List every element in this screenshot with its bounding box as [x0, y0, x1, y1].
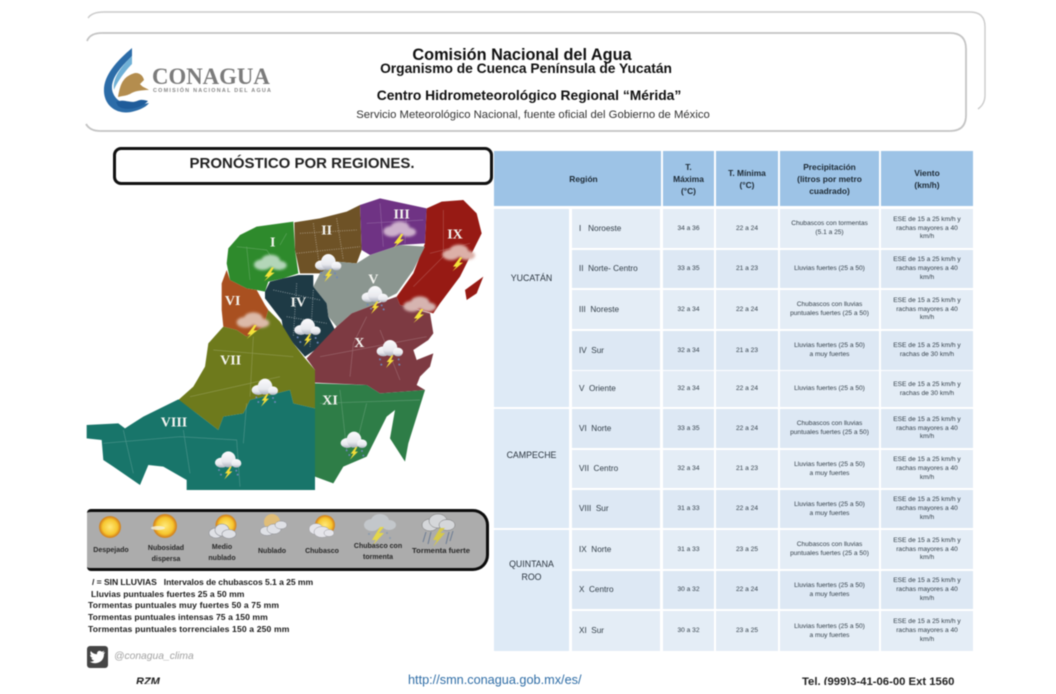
icon: pink cloud region X north: [403, 296, 436, 323]
row: VI Norte: 33 a 35: [678, 425, 700, 432]
heading: organization: [356, 46, 710, 122]
state: Yucatán: YUCATÁN: [511, 273, 552, 283]
row: X Centro: Lluvias fuertes (25 a 50): [794, 582, 865, 589]
icon: pink cloud region IX: [442, 245, 475, 271]
state: Quintana Roo: [494, 530, 569, 651]
row: VII Centro: a muy fuertes: [810, 470, 849, 476]
table header: cuadrado): [809, 186, 850, 196]
website link: http://smn.conagua.gob.mx/es/: [408, 673, 582, 687]
row: III Noreste: 32 a 34: [678, 306, 700, 313]
legend panel: Despejado: [93, 547, 129, 554]
row: I Noroeste: 22 a 24: [736, 225, 758, 232]
region polygons: [87, 198, 483, 490]
rainfall intensity notes: Tormentas puntuales intensas 75 a 150 mm: [88, 612, 268, 622]
row: III Noreste: ESE de 15 a 25 km/h y: [893, 297, 961, 304]
row: XI Sur: ESE de 15 a 25 km/h y: [893, 618, 961, 625]
row: XI Sur: km/h: [920, 636, 934, 643]
row: X Centro: rachas mayores a 40: [896, 586, 958, 593]
row: III Noreste: km/h: [920, 314, 934, 321]
row: X Centro: ESE de 15 a 25 km/h y: [893, 577, 961, 584]
row: IX Norte: [572, 530, 974, 570]
icon: pink cloud region VI: [237, 312, 269, 339]
state: Yucatán: [494, 209, 569, 407]
legend panel: Nubosidad: [148, 545, 184, 552]
twitter handle: @conagua_clima: [114, 651, 194, 662]
row: V Oriente: 32 a 34: [678, 385, 700, 392]
region labels: X: [354, 336, 364, 351]
heading: organization: Organismo de Cuenca Península de Yucatán: [380, 61, 672, 76]
legend panel: Tormenta fuerte: [412, 546, 470, 555]
row: VI Norte: Chubascos con lluvias: [797, 420, 862, 427]
legend panel: Nublado: [258, 548, 286, 555]
icon: chubasco: [309, 515, 335, 538]
row: VI Norte: VI Norte: [579, 424, 611, 433]
row: X Centro: [572, 570, 974, 610]
row: II Norte-Centro: Lluvias fuertes (25 a 50): [794, 265, 865, 272]
map texture lines: [103, 203, 470, 487]
row: II Norte-Centro: km/h: [920, 274, 934, 281]
region labels: VIII: [161, 416, 187, 431]
row: VI Norte: [572, 408, 974, 448]
row: XI Sur: 30 a 32: [678, 627, 700, 634]
icon: despejado: [99, 516, 121, 538]
row: X Centro: km/h: [920, 595, 934, 602]
row: VIII Sur: VIII Sur: [579, 504, 609, 513]
heading: organization: Centro Hidrometeorológico Regional “Mérida”: [377, 87, 681, 103]
row: I Noroeste: I Noroeste: [579, 224, 621, 233]
legend panel: tormenta: [363, 554, 393, 560]
row: VIII Sur: Lluvias fuertes (25 a 50): [794, 501, 865, 508]
row: VI Norte: km/h: [920, 433, 934, 440]
row: III Noreste: III Noreste: [579, 305, 619, 314]
table header: (litros por metro: [797, 174, 862, 184]
row: XI Sur: a muy fuertes: [810, 632, 849, 638]
legend panel: Chubasco con: [354, 543, 402, 550]
row: XI Sur: [572, 610, 974, 652]
region labels: VII: [220, 353, 241, 368]
icon: nubosidad dispersa: [151, 514, 177, 538]
rainfall intensity notes: Lluvias puntuales fuertes 25 a 50 mm: [91, 589, 244, 599]
row: XI Sur: XI Sur: [579, 626, 604, 635]
table header: (°C): [740, 180, 754, 190]
logo: CONAGUA: COMISIÓN NACIONAL DEL AGUA: [153, 88, 272, 94]
row: III Noreste: puntuales fuertes (25 a 50): [790, 310, 869, 317]
row: X Centro: X Centro: [579, 585, 614, 594]
panel title: pronóstico por regiones: PRONÓSTICO POR REGIONES.: [189, 155, 415, 172]
legend panel: [87, 509, 489, 571]
rainfall intensity notes: [88, 577, 314, 634]
row: IX Norte: puntuales fuertes (25 a 50): [790, 550, 869, 557]
legend panel: Medio: [212, 544, 232, 551]
table header: Viento: [914, 168, 940, 178]
legend panel: nublado: [208, 554, 236, 562]
row: IV Sur: a muy fuertes: [810, 351, 849, 358]
row: V Oriente: V Oriente: [579, 384, 616, 393]
row: VI Norte: 22 a 24: [736, 425, 758, 432]
row: II Norte-Centro: 21 a 23: [736, 265, 758, 272]
row: VII Centro: rachas mayores a 40: [896, 465, 958, 472]
row: V Oriente: Lluvias fuertes (25 a 50): [794, 385, 865, 392]
row: VII Centro: 32 a 34: [678, 465, 700, 472]
row: I Noroeste: rachas mayores a 40: [896, 225, 958, 232]
row: VIII Sur: km/h: [920, 514, 934, 521]
icon: storm cloud region X: [377, 340, 403, 368]
icon: nublado: [260, 514, 287, 536]
header frames: [85, 10, 986, 132]
row: XI Sur: rachas mayores a 40: [896, 627, 958, 634]
row: VIII Sur: a muy fuertes: [810, 510, 849, 516]
logo: CONAGUA: CONAGUA: [152, 64, 270, 89]
region labels: [161, 208, 463, 431]
table header: Máxima: [673, 174, 704, 184]
row: IV Sur: 32 a 34: [678, 347, 700, 354]
row: IX Norte: 23 a 25: [736, 546, 758, 553]
row: VIII Sur: 22 a 24: [736, 505, 758, 512]
region labels: V: [368, 272, 378, 287]
row: I Noroeste: (5.1 a 25): [815, 229, 844, 236]
region labels: XI: [322, 393, 338, 408]
icon: translucent green cloud region I: [254, 255, 287, 281]
row: III Noreste: [572, 290, 974, 330]
icon: medio nublado: [209, 514, 236, 538]
rainfall intensity notes: / = SIN LLUVIAS Intervalos de chubascos 5.1 a 25 mm: [92, 577, 313, 587]
state: Quintana Roo: ROO: [521, 572, 542, 582]
table header: T. Mínima: [728, 168, 766, 178]
row: VII Centro: km/h: [920, 474, 934, 481]
table header: [493, 150, 974, 206]
region labels: IX: [447, 227, 463, 242]
heading: organization: Servicio Meteorológico Nacional, fuente oficial del Gobierno de México: [356, 109, 710, 121]
row: IX Norte: ESE de 15 a 25 km/h y: [893, 537, 961, 544]
row: I Noroeste: km/h: [920, 233, 934, 240]
row: IV Sur: Lluvias fuertes (25 a 50): [794, 342, 865, 349]
row: VIII Sur: [572, 490, 974, 528]
row: I Noroeste: Chubascos con tormentas: [791, 220, 868, 227]
table header: T.: [685, 162, 692, 172]
region labels: VI: [225, 294, 240, 309]
row: XI Sur: Lluvias fuertes (25 a 50): [794, 623, 865, 630]
row: IX Norte: 31 a 33: [678, 546, 700, 553]
icon: storm cloud region V: [362, 286, 388, 314]
row: VI Norte: puntuales fuertes (25 a 50): [790, 429, 869, 436]
state: Quintana Roo: QUINTANA: [509, 559, 554, 569]
row: IX Norte: IX Norte: [579, 545, 611, 554]
row: II Norte-Centro: rachas mayores a 40: [896, 265, 958, 272]
row: III Noreste: rachas mayores a 40: [896, 306, 958, 313]
legend labels: [93, 542, 470, 563]
heading: organization: Comisión Nacional del Agua: [412, 46, 632, 64]
row: IV Sur: ESE de 15 a 25 km/h y: [893, 342, 961, 349]
row: IX Norte: Chubascos con lluvias: [797, 541, 862, 548]
row: X Centro: 30 a 32: [678, 586, 700, 593]
row: III Noreste: 22 a 24: [736, 306, 758, 313]
row: VIII Sur: ESE de 15 a 25 km/h y: [893, 496, 961, 503]
row: VI Norte: rachas mayores a 40: [896, 425, 958, 432]
icon: pink cloud region III: [383, 221, 416, 248]
rainfall intensity notes: Tormentas puntuales muy fuertes 50 a 75 mm: [88, 600, 279, 610]
region labels: II: [321, 223, 332, 238]
rainfall intensity notes: Tormentas puntuales torrenciales 150 a 250 mm: [88, 624, 290, 634]
row: II Norte-Centro: ESE de 15 a 25 km/h y: [893, 256, 961, 263]
row: II Norte-Centro: II Norte- Centro: [579, 264, 638, 273]
row: IX Norte: rachas mayores a 40: [896, 546, 958, 553]
row: VIII Sur: 31 a 33: [678, 505, 700, 512]
row: II Norte-Centro: 33 a 35: [678, 265, 700, 272]
row: V Oriente: [572, 370, 974, 408]
icon: storm cloud region VIII: [215, 451, 241, 479]
table header: (km/h): [914, 180, 940, 190]
region labels: I: [270, 236, 275, 251]
icon: chubasco con tormenta: [364, 514, 396, 546]
row: XI Sur: 23 a 25: [736, 627, 758, 634]
row: I Noroeste: [572, 208, 974, 248]
row: III Noreste: Chubascos con lluvias: [797, 301, 862, 308]
table header: Región: [569, 174, 598, 184]
legend panel: dispersa: [152, 556, 180, 562]
row: VII Centro: ESE de 15 a 25 km/h y: [893, 456, 961, 463]
icon: storm cloud region XI: [341, 432, 367, 460]
region labels: IV: [291, 296, 306, 311]
row: V Oriente: ESE de 15 a 25 km/h y: [893, 381, 961, 388]
legend icons: [98, 513, 456, 546]
row: VIII Sur: rachas mayores a 40: [896, 505, 958, 512]
row: I Noroeste: ESE de 15 a 25 km/h y: [893, 216, 961, 223]
row: VI Norte: ESE de 15 a 25 km/h y: [893, 416, 961, 423]
row: IV Sur: 21 a 23: [736, 347, 758, 354]
row: V Oriente: 22 a 24: [736, 385, 758, 392]
icon: twitter: [86, 645, 109, 669]
icon: storm cloud region VII: [252, 379, 278, 407]
row: II Norte-Centro: [572, 250, 974, 288]
table header: (°C): [681, 186, 696, 196]
row: X Centro: 22 a 24: [736, 586, 758, 593]
logo: CONAGUA: [103, 48, 272, 114]
icon: tormenta fuerte: [422, 514, 455, 547]
icon: storm cloud region II: [315, 254, 341, 282]
icon: storm cloud region IV: [294, 319, 321, 347]
row: X Centro: a muy fuertes: [810, 590, 849, 598]
legend panel: Chubasco: [305, 548, 339, 555]
row: VII Centro: [572, 450, 974, 488]
region labels: III: [393, 208, 410, 223]
row: IV Sur: rachas de 30 km/h: [900, 351, 954, 358]
row: IV Sur: [572, 330, 974, 370]
row: VII Centro: VII Centro: [579, 464, 618, 473]
row: I Noroeste: 34 a 36: [678, 225, 700, 232]
row: V Oriente: rachas de 30 km/h: [900, 390, 954, 396]
row: IV Sur: IV Sur: [579, 346, 604, 355]
table header: Precipitación: [803, 162, 856, 172]
state: Campeche: CAMPECHE: [507, 450, 556, 460]
row: VII Centro: 21 a 23: [736, 465, 758, 472]
row: VII Centro: Lluvias fuertes (25 a 50): [794, 461, 865, 468]
state: Campeche: [494, 409, 569, 528]
regional map: [86, 198, 484, 491]
panel title: pronóstico por regiones: [113, 147, 493, 185]
row: IX Norte: km/h: [920, 554, 934, 561]
